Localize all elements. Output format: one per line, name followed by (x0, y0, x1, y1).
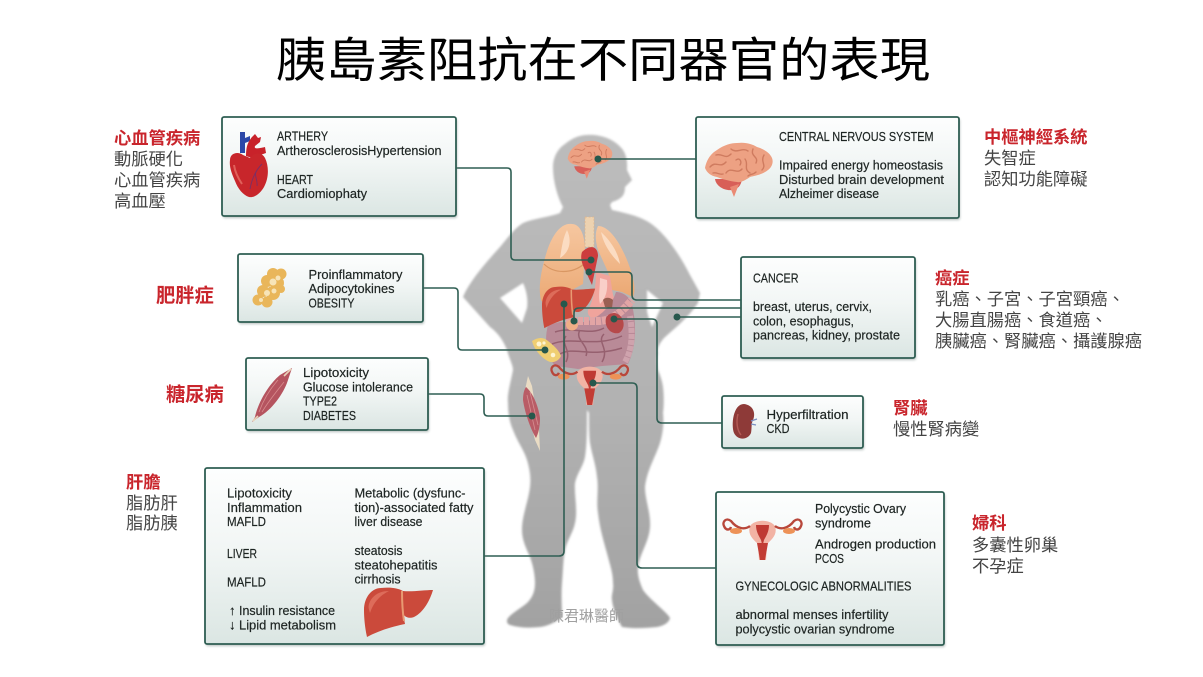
label: central nervous system: 中樞神經系統 (984, 127, 1088, 147)
label: cancer: 大腸直腸癌、食道癌、 (935, 310, 1108, 330)
label: gynecology: 不孕症 (972, 556, 1024, 576)
text: liver right column: cirrhosis (354, 572, 401, 586)
stomach (588, 272, 616, 318)
panel: liver (205, 468, 485, 646)
text: liver left column: MAFLD (227, 514, 266, 529)
text: gynecologic: GYNECOLOGIC ABNORMALITIES (736, 578, 912, 594)
text: obesity: OBESITY (308, 296, 355, 310)
connector: cancer 3 (674, 314, 741, 320)
gallbladder (566, 320, 578, 330)
label: central nervous system: 失智症 (984, 148, 1036, 168)
icon: kidney (733, 404, 757, 439)
text: heart: Cardiomiophaty (277, 186, 367, 201)
label: central nervous system (984, 127, 1088, 189)
panel: heart (222, 117, 457, 218)
label: cardiovascular: 高血壓 (114, 191, 166, 211)
text: kidney: CKD (766, 421, 790, 436)
text: liver left column: Insulin resistance (239, 603, 335, 618)
text: central nervous system: Disturbed brain development (779, 172, 944, 187)
fat organ (532, 338, 561, 362)
connector: heart (456, 168, 594, 264)
label: cardiovascular (114, 128, 200, 211)
text: liver right column: liver disease (354, 514, 422, 529)
panel: diabetes (246, 358, 429, 432)
text: obesity: Proinflammatory (308, 267, 403, 282)
text: central nervous system: Alzheimer disease (779, 186, 879, 201)
text: liver right column: Metabolic (dysfunc- (354, 486, 466, 500)
label: cardiovascular: 動脈硬化 (114, 149, 183, 169)
text: diabetes (303, 365, 413, 423)
title: 胰島素阻抗在不同器官的表現 (276, 35, 930, 88)
text: gynecologic: Androgen production (815, 536, 936, 552)
trachea (585, 217, 594, 247)
lungs (540, 224, 634, 306)
connector: gynecologic (590, 380, 716, 568)
muscle organ (523, 376, 540, 451)
label: diabetes: 糖尿病 (166, 383, 224, 406)
icon: uterus (723, 520, 802, 560)
text: heart: ArtherosclerosisHypertension (277, 143, 442, 158)
label: liver and gallbladder: 肝膽 (126, 472, 161, 492)
watermark: 陳君琳醫師 (549, 608, 624, 625)
text: liver left column: LIVER (227, 546, 257, 561)
label: cancer (935, 268, 1142, 351)
text: liver left column (227, 486, 336, 632)
text: liver left column: Lipotoxicity (227, 486, 292, 500)
heart organ (581, 247, 598, 285)
text: heart: HEART (277, 172, 313, 187)
text: obesity: Adipocytokines (308, 281, 395, 296)
label: central nervous system: 認知功能障礙 (984, 169, 1088, 189)
panel: cancer (741, 257, 916, 360)
text: kidney (766, 407, 848, 436)
connector: fat (423, 288, 548, 354)
label: cancer: 胰臟癌、腎臟癌、攝護腺癌 (935, 331, 1142, 351)
text: cancer: breast, uterus, cervix, (753, 299, 872, 314)
panel: obesity (238, 254, 424, 324)
text: kidney: Hyperfiltration (766, 407, 848, 422)
text: liver left column: Inflammation (227, 500, 302, 515)
label: kidney: 慢性腎病變 (893, 419, 979, 439)
label: cancer: 癌症 (935, 268, 970, 288)
text: heart: ARTHERY (277, 128, 328, 144)
intestines (546, 292, 635, 369)
text: gynecologic: syndrome (815, 516, 871, 530)
text: heart (277, 128, 442, 201)
brain organ (568, 141, 612, 179)
text: liver right column (354, 486, 474, 586)
text: liver left column: Lipid metabolism (239, 618, 336, 632)
text: liver right column: steatosis (354, 543, 403, 558)
panel: kidney (722, 396, 864, 450)
text: diabetes: TYPE2 (303, 394, 337, 408)
body silhouette (463, 135, 700, 628)
uterus organ (551, 365, 628, 405)
text: diabetes: Lipotoxicity (303, 365, 369, 380)
text: gynecologic: Polycystic Ovary (815, 501, 906, 516)
label: kidney (893, 398, 979, 439)
text: liver left column: MAFLD (227, 574, 266, 590)
text: obesity (308, 267, 403, 310)
text: central nervous system: Impaired energy homeostasis (779, 158, 943, 172)
text: diabetes: Glucose intolerance (303, 380, 413, 394)
icon: brain (705, 143, 773, 197)
label: gynecology: 婦科 (972, 513, 1007, 533)
text: cancer: colon, esophagus, (753, 314, 854, 328)
label: gynecology: 多囊性卵巢 (972, 535, 1058, 555)
text: liver left column: ↑ (229, 603, 236, 618)
text: gynecologic (736, 501, 936, 636)
connector: brain (594, 156, 696, 162)
text: cancer: CANCER (753, 270, 798, 286)
text: central nervous system (779, 129, 944, 201)
organs (523, 217, 635, 451)
connector: cancer 1 (586, 268, 741, 300)
connector: cancer 2 (570, 308, 741, 324)
label: cardiovascular: 心血管疾病 (114, 170, 200, 190)
text: liver right column: steatohepatitis (354, 558, 438, 572)
icon: liver (364, 588, 433, 637)
icon: muscle (252, 368, 292, 422)
connector: liver (484, 300, 568, 556)
text: cancer: pancreas, kidney, prostate (753, 328, 900, 342)
text: cancer (753, 270, 900, 342)
text: gynecologic: abnormal menses infertility (736, 607, 889, 622)
label: kidney: 腎臟 (893, 398, 928, 418)
label: gynecology (972, 513, 1058, 576)
icon: fat cells (252, 268, 286, 308)
text: central nervous system: CENTRAL NERVOUS SYSTEM (779, 129, 934, 144)
label: obesity: 肥胖症 (156, 285, 214, 307)
label: liver and gallbladder: 脂肪胰 (126, 513, 178, 533)
text: liver left column: ↓ (229, 618, 236, 632)
kidney organ (606, 313, 624, 333)
connector: kidney (610, 316, 722, 423)
text: gynecologic: PCOS (815, 551, 844, 566)
icon: heart (230, 132, 268, 197)
label: cardiovascular: 心血管疾病 (114, 128, 200, 148)
text: diabetes: DIABETES (303, 408, 356, 423)
text: gynecologic: polycystic ovarian syndrome (736, 622, 894, 636)
label: cancer: 乳癌、子宮、子宮頸癌、 (935, 289, 1125, 309)
label: liver and gallbladder: 脂肪肝 (126, 493, 178, 513)
connector: muscle (428, 394, 536, 420)
text: liver right column: tion)-associated fatty (354, 500, 474, 515)
panel: central nervous system (696, 117, 960, 220)
liver organ (542, 287, 595, 328)
panel: gynecologic (716, 492, 945, 647)
label: liver and gallbladder (126, 472, 178, 533)
